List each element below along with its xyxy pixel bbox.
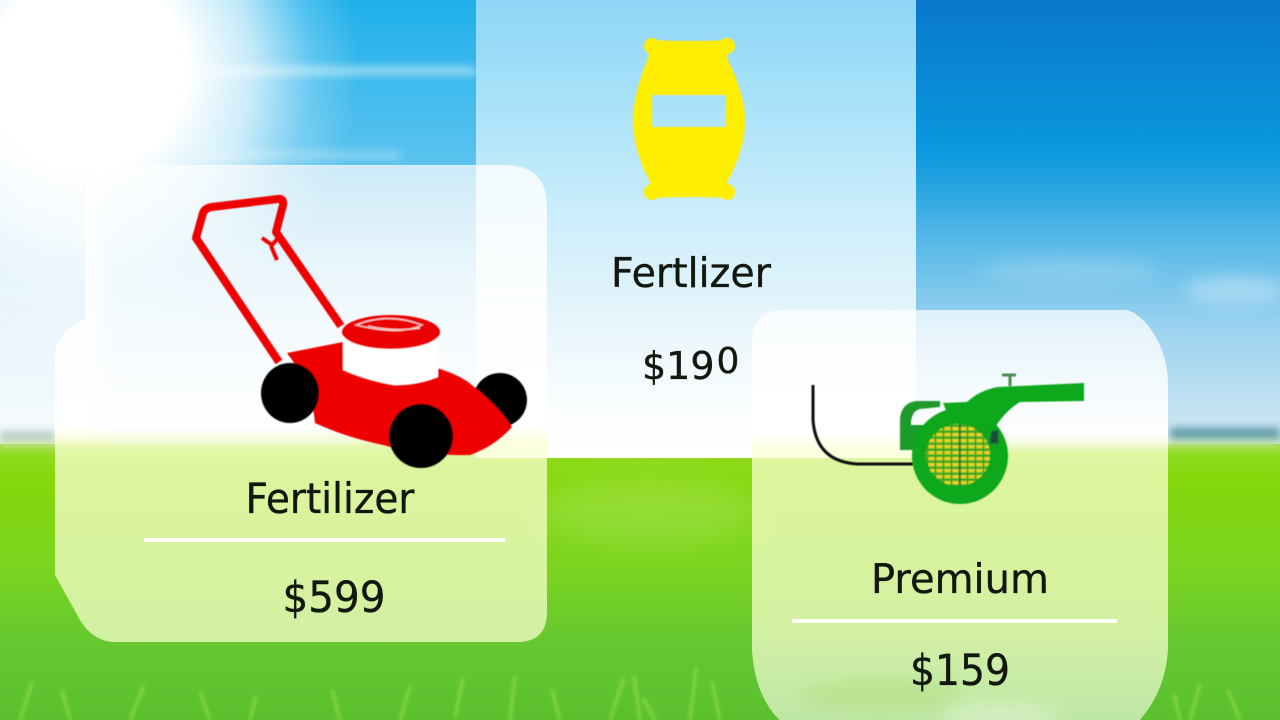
blower hose bbox=[813, 385, 915, 464]
price: $190: $19 bbox=[642, 344, 715, 388]
heading: premium: Premium bbox=[871, 555, 1049, 603]
icon: red lawn mower bbox=[196, 199, 527, 468]
panel: leaf blower card bbox=[752, 310, 1168, 720]
panel: fertilizer bag card bbox=[476, 0, 916, 458]
price: $599: $599 bbox=[282, 573, 386, 623]
price: $190: 0 bbox=[717, 341, 739, 382]
blower housing bbox=[912, 408, 1008, 504]
mower handle lever bbox=[262, 236, 280, 260]
icon: yellow fertilizer bag bbox=[633, 38, 745, 200]
grass blades showing through card bbox=[800, 679, 1060, 720]
blower trigger bbox=[1002, 375, 1016, 386]
divider line bbox=[144, 538, 505, 542]
heading: fertilizer: Fertlizer bbox=[611, 249, 771, 297]
left wheel bbox=[261, 363, 319, 423]
background: grass field bbox=[0, 427, 1280, 720]
icon: green leaf blower bbox=[813, 375, 1084, 504]
rear wheel bbox=[473, 373, 527, 427]
engine cap bbox=[342, 315, 440, 349]
mower deck bbox=[287, 342, 512, 455]
divider line bbox=[792, 619, 1117, 623]
blower mesh grille bbox=[926, 424, 990, 486]
blower grille detail bbox=[960, 424, 998, 486]
front wheel bbox=[389, 404, 453, 468]
blower handle bbox=[900, 401, 940, 448]
background: sky and sun bbox=[0, 0, 1280, 450]
mower handle bbox=[196, 199, 341, 362]
heading: fertilizer: Fertilizer bbox=[246, 474, 415, 523]
blower spout bbox=[943, 383, 1084, 430]
engine cap highlight bbox=[356, 318, 422, 330]
engine body bbox=[343, 336, 438, 385]
panel: lawn mower card bbox=[55, 165, 547, 642]
price: $159: $159 bbox=[910, 646, 1010, 696]
